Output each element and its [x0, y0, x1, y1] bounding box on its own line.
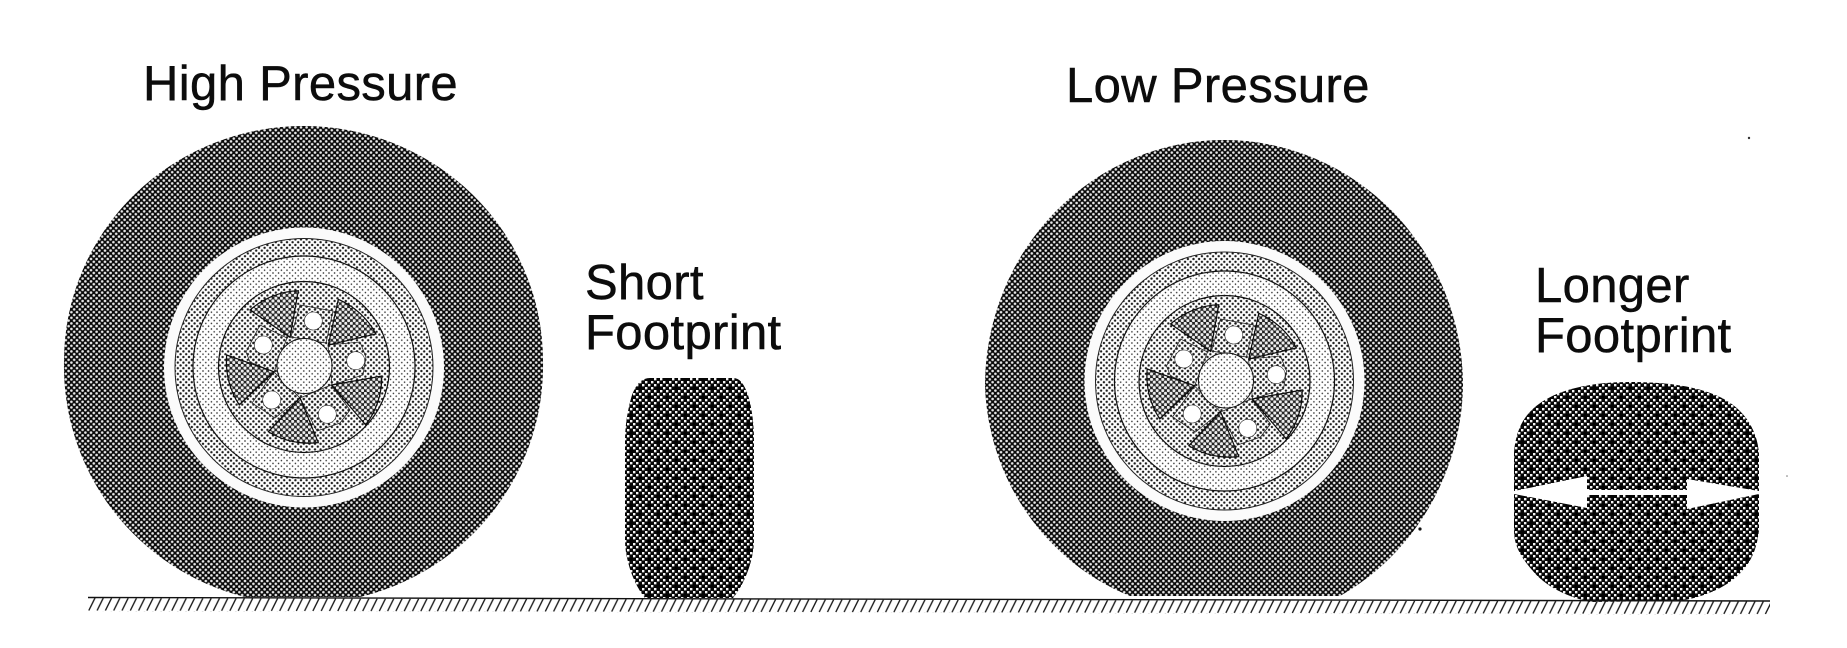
- bolt holes: [1175, 326, 1285, 437]
- spoke wedges: [1147, 305, 1302, 457]
- bolt plate: [1166, 319, 1286, 445]
- inner light ring: [1114, 271, 1334, 491]
- white rim: [164, 228, 444, 508]
- bolt plate: [246, 305, 366, 431]
- outer stipple ring: [175, 238, 433, 496]
- ground line with hatching: [88, 598, 1770, 614]
- white rim: [1084, 241, 1364, 521]
- low pressure tire: [985, 140, 1463, 596]
- label: longer footprint: Longer: [1535, 259, 1690, 313]
- short footprint shape: [625, 378, 754, 598]
- tire body: [985, 140, 1463, 596]
- longer footprint shape: [1514, 382, 1759, 602]
- disc: [218, 282, 390, 452]
- wheel: [1084, 241, 1364, 521]
- title: low pressure: Low Pressure: [1066, 59, 1370, 113]
- outer stipple ring: [1096, 252, 1354, 510]
- label: longer footprint: Footprint: [1535, 309, 1732, 363]
- double-headed width arrow: [1514, 476, 1759, 509]
- ground surface: [88, 598, 1770, 601]
- hatching: [88, 598, 1770, 614]
- spoke wedges: [226, 291, 382, 443]
- tire body: [64, 126, 543, 597]
- inner light ring: [193, 256, 415, 478]
- hub: [277, 338, 332, 394]
- label: short footprint: Short: [585, 256, 704, 310]
- tread area: [1514, 382, 1759, 602]
- bolt holes: [254, 312, 365, 423]
- high pressure tire: [64, 126, 543, 597]
- wheel: [164, 228, 444, 508]
- label: short footprint: Footprint: [585, 306, 782, 360]
- hub: [1198, 353, 1254, 408]
- disc: [1139, 296, 1310, 466]
- title: high pressure: High Pressure: [143, 57, 458, 111]
